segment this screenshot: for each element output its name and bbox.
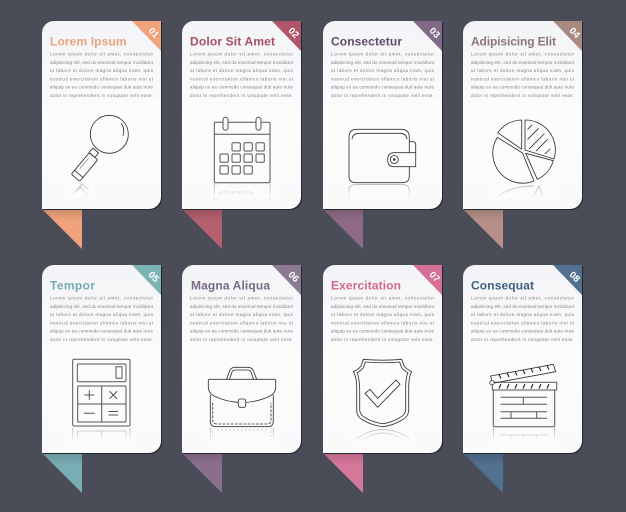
text block 07: dolor in reprehenderit in voluptate velit esse. — [331, 337, 434, 342]
panel: card 05 Tempor — [42, 265, 162, 493]
text block 05: ut labore et dolore magna aliqua niam, quis — [50, 312, 154, 317]
icon: magnifying glass — [68, 115, 128, 198]
icon: wallet — [345, 129, 416, 198]
corner tag 04: 04 — [567, 26, 582, 41]
text block 03: aliquip ex ea commodo consequat duit aute irure — [331, 84, 434, 90]
text block 05 — [50, 296, 154, 342]
text block 01: nostrud exercitation ullamco laboris nisi ut — [50, 76, 154, 81]
panel: card 04 Adipisicing Elit — [463, 21, 583, 249]
ribbon 06 — [182, 453, 222, 493]
text block 03: dolor in reprehenderit in voluptate velit esse. — [331, 93, 434, 98]
ribbon 08 — [463, 453, 503, 493]
text block 02: ut labore et dolore magna aliqua niam, quis — [190, 68, 294, 73]
text block 03 — [331, 52, 435, 98]
panel: card 02 Dolor Sit Amet — [182, 21, 302, 249]
ribbon 05 — [42, 453, 82, 493]
icon: briefcase — [207, 367, 277, 442]
panel: card 07 Exercitation — [323, 265, 443, 493]
text block 07: nostrud exercitation ullamco laboris nisi ut — [331, 320, 435, 325]
text block 08: dolor in reprehenderit in voluptate velit esse. — [471, 337, 574, 342]
text block 01 — [50, 52, 154, 98]
ribbon 04 — [463, 209, 503, 249]
text block 01: aliquip ex ea commodo consequat duit aute irure — [50, 84, 153, 90]
corner tag 07: 07 — [427, 270, 442, 285]
ribbon 02 — [182, 209, 222, 249]
ribbon 03 — [323, 209, 363, 249]
text block 04: Lorem ipsum dolor sit amet, consectetur — [471, 52, 575, 56]
corner tag 04 — [553, 21, 582, 51]
card body 08 — [463, 265, 583, 454]
corner tag 08: 08 — [567, 270, 582, 285]
ribbon 07 — [323, 453, 363, 493]
heading 05: Tempor — [50, 278, 95, 292]
text block 08: nostrud exercitation ullamco laboris nisi ut — [471, 320, 575, 325]
text block 04: adipisicing elit, sed do eiusmod tempor incididunt — [471, 60, 575, 65]
icon: calculator — [69, 359, 134, 442]
text block 06: ut labore et dolore magna aliqua niam, quis — [190, 312, 294, 317]
text block 07: Lorem ipsum dolor sit amet, consectetur — [331, 296, 435, 300]
text block 04 — [471, 52, 575, 98]
text block 02: dolor in reprehenderit in voluptate velit esse. — [190, 93, 293, 98]
card body 01 — [42, 21, 162, 210]
text block 04: nostrud exercitation ullamco laboris nisi ut — [471, 76, 575, 81]
icon: calendar — [210, 117, 274, 199]
text block 05: aliquip ex ea commodo consequat duit aute irure — [50, 328, 153, 334]
corner tag 08 — [553, 265, 582, 295]
text block 03: Lorem ipsum dolor sit amet, consectetur — [331, 52, 435, 56]
heading 08: Consequat — [471, 278, 534, 292]
text block 06 — [190, 296, 294, 342]
text block 04: dolor in reprehenderit in voluptate velit esse. — [471, 93, 574, 98]
text block 02: aliquip ex ea commodo consequat duit aute irure — [190, 84, 293, 90]
text block 07: aliquip ex ea commodo consequat duit aute irure — [331, 328, 434, 334]
icon: clapperboard — [490, 364, 558, 443]
text block 04: ut labore et dolore magna aliqua niam, quis — [471, 68, 575, 73]
text block 05: dolor in reprehenderit in voluptate velit esse. — [50, 337, 153, 342]
panel: card 08 Consequat — [463, 265, 583, 493]
text block 01: Lorem ipsum dolor sit amet, consectetur — [50, 52, 154, 56]
heading 01: Lorem Ipsum — [50, 34, 126, 48]
corner tag 02: 02 — [286, 26, 301, 41]
text block 02: nostrud exercitation ullamco laboris nisi ut — [190, 76, 294, 81]
text block 06: aliquip ex ea commodo consequat duit aute irure — [190, 328, 293, 334]
card body 05 — [42, 265, 162, 454]
heading 02: Dolor Sit Amet — [190, 34, 275, 48]
panel: card 03 Consectetur — [323, 21, 443, 249]
text block 03: nostrud exercitation ullamco laboris nisi ut — [331, 76, 435, 81]
heading 04: Adipisicing Elit — [471, 34, 556, 48]
text block 07: ut labore et dolore magna aliqua niam, quis — [331, 312, 435, 317]
corner tag 01: 01 — [146, 26, 161, 41]
card body 06 — [182, 265, 302, 454]
panel: card 01 Lorem Ipsum — [42, 21, 162, 249]
corner tag 03: 03 — [427, 26, 442, 41]
text block 08: aliquip ex ea commodo consequat duit aute irure — [471, 328, 574, 334]
text block 04: aliquip ex ea commodo consequat duit aute irure — [471, 84, 574, 90]
text block 02: adipisicing elit, sed do eiusmod tempor incididunt — [190, 60, 294, 65]
corner tag 06: 06 — [286, 270, 301, 285]
text block 07 — [331, 296, 435, 342]
text block 05: adipisicing elit, sed do eiusmod tempor incididunt — [50, 304, 154, 309]
text block 01: ut labore et dolore magna aliqua niam, quis — [50, 68, 154, 73]
text block 05: Lorem ipsum dolor sit amet, consectetur — [50, 296, 154, 300]
text block 03: adipisicing elit, sed do eiusmod tempor incididunt — [331, 60, 435, 65]
card body 02 — [182, 21, 302, 210]
text block 08: ut labore et dolore magna aliqua niam, quis — [471, 312, 575, 317]
text block 03: ut labore et dolore magna aliqua niam, quis — [331, 68, 435, 73]
text block 06: adipisicing elit, sed do eiusmod tempor incididunt — [190, 304, 294, 309]
text block 01: dolor in reprehenderit in voluptate velit esse. — [50, 93, 153, 98]
text block 02: Lorem ipsum dolor sit amet, consectetur — [190, 52, 294, 56]
heading 03: Consectetur — [331, 34, 402, 48]
text block 06: nostrud exercitation ullamco laboris nisi ut — [190, 320, 294, 325]
corner tag 01 — [132, 21, 161, 51]
text block 06: Lorem ipsum dolor sit amet, consectetur — [190, 296, 294, 300]
card body 07 — [323, 265, 443, 454]
text block 05: nostrud exercitation ullamco laboris nisi ut — [50, 320, 154, 325]
heading 07: Exercitation — [331, 278, 401, 292]
corner tag 06 — [272, 265, 301, 295]
card body 04 — [463, 21, 583, 210]
text block 07: adipisicing elit, sed do eiusmod tempor incididunt — [331, 304, 435, 309]
panel: card 06 Magna Aliqua — [182, 265, 302, 493]
text block 08 — [471, 296, 575, 342]
text block 08: adipisicing elit, sed do eiusmod tempor incididunt — [471, 304, 575, 309]
corner tag 07 — [413, 265, 442, 295]
corner tag 05: 05 — [146, 270, 161, 285]
corner tag 03 — [413, 21, 442, 51]
corner tag 05 — [132, 265, 161, 295]
text block 01: adipisicing elit, sed do eiusmod tempor incididunt — [50, 60, 154, 65]
heading 06: Magna Aliqua — [191, 278, 270, 292]
icon: shield with check — [351, 359, 415, 442]
card body 03 — [323, 21, 443, 210]
icon: pie chart — [493, 120, 555, 199]
text block 06: dolor in reprehenderit in voluptate velit esse. — [190, 337, 293, 342]
ribbon 01 — [42, 209, 82, 249]
corner tag 02 — [272, 21, 301, 51]
text block 08: Lorem ipsum dolor sit amet, consectetur — [471, 296, 575, 300]
text block 02 — [190, 52, 294, 98]
